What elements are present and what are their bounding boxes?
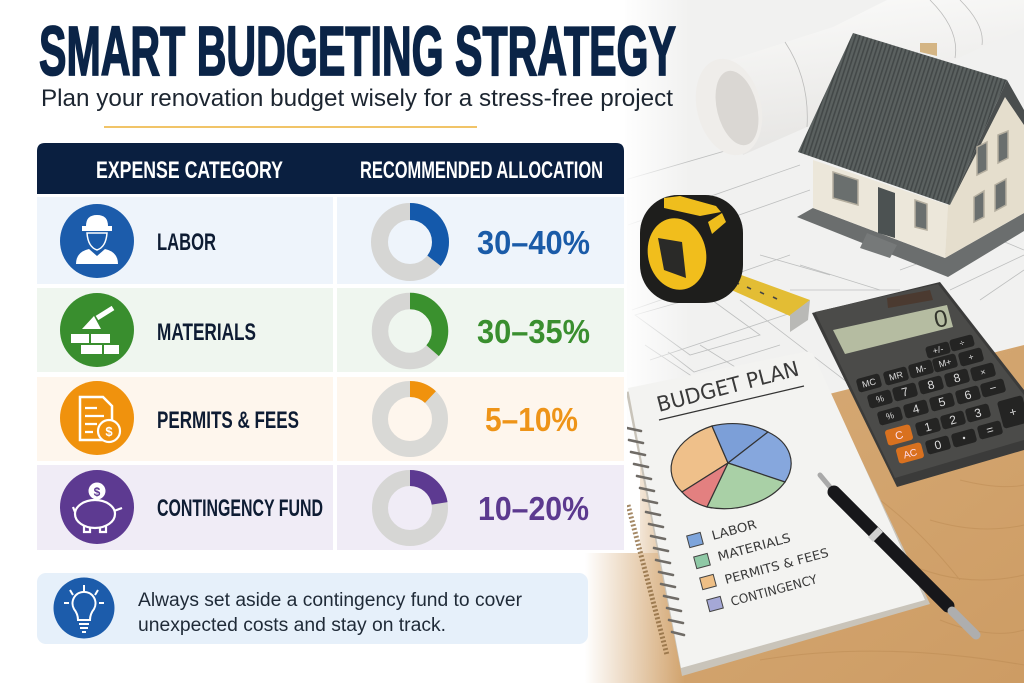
calculator keys: 0 bbox=[933, 437, 943, 453]
calculator bbox=[812, 282, 1024, 487]
calculator keys: M+ bbox=[938, 357, 952, 369]
tape measure bbox=[640, 195, 810, 332]
wooden table bbox=[560, 345, 1024, 683]
table header: RECOMMENDED ALLOCATION bbox=[360, 157, 603, 184]
notebook pie chart bbox=[671, 424, 791, 509]
model house bbox=[797, 33, 1024, 277]
row: materials bbox=[37, 288, 624, 372]
donut: 30-35% bbox=[380, 301, 440, 361]
callout: contingency tip: Always set aside a contingency fund to cover bbox=[138, 590, 523, 611]
calculator display digit: 0 bbox=[932, 305, 950, 334]
calculator keys: 7 bbox=[900, 384, 910, 400]
donut: 30-40% bbox=[380, 212, 440, 272]
row: materials: 30–35% bbox=[477, 313, 590, 350]
row: contingency fund: 10–20% bbox=[478, 490, 589, 527]
row: contingency fund: CONTINGENCY FUND bbox=[157, 495, 323, 522]
calculator keys: 4 bbox=[911, 401, 921, 417]
row: labor: 30–40% bbox=[477, 224, 590, 261]
white fade into photo bbox=[620, 0, 690, 553]
icon: trowel and bricks bbox=[60, 293, 134, 367]
calculator keys: • bbox=[961, 433, 967, 443]
calculator keys: AC bbox=[902, 447, 919, 462]
wood fade at lower left bbox=[560, 553, 685, 683]
row: labor: LABOR bbox=[157, 229, 216, 256]
table header bbox=[37, 143, 624, 194]
icon: piggy bank: $ bbox=[94, 485, 101, 499]
icon: light bulb bbox=[54, 578, 114, 638]
icon: piggy bank bbox=[60, 470, 134, 544]
calculator keys: 8 bbox=[952, 370, 962, 386]
calculator keys: % bbox=[885, 410, 895, 422]
table backing bbox=[37, 143, 627, 553]
calculator keys: M- bbox=[915, 363, 927, 375]
calculator keys: 6 bbox=[963, 387, 973, 403]
calculator keys: + bbox=[1008, 404, 1018, 420]
donut: 5-10% bbox=[380, 389, 440, 449]
calculator keys: MR bbox=[888, 369, 905, 383]
calculator keys: × bbox=[979, 366, 987, 378]
notebook bbox=[626, 352, 930, 676]
calculator keys: 8 bbox=[926, 377, 936, 393]
notebook legend: PERMITS & FEES bbox=[723, 545, 830, 587]
calculator keys: + bbox=[967, 351, 975, 363]
photo: renovation planning desk bbox=[560, 0, 1024, 683]
calculator keys: +/- bbox=[932, 344, 944, 356]
row: permits and fees: PERMITS & FEES bbox=[157, 407, 299, 434]
gold divider bbox=[104, 126, 477, 128]
row: materials: MATERIALS bbox=[157, 319, 256, 346]
icon: worker bbox=[60, 204, 134, 278]
blueprint paper bbox=[625, 0, 1024, 440]
row: permits and fees bbox=[37, 377, 624, 461]
calculator keys: 1 bbox=[923, 419, 933, 435]
callout: contingency tip bbox=[37, 573, 588, 644]
calculator keys: 3 bbox=[973, 405, 983, 421]
calculator keys: − bbox=[988, 380, 998, 396]
expense table bbox=[37, 143, 627, 553]
notebook legend: CONTINGENCY bbox=[729, 571, 819, 609]
donut: 10-20% bbox=[380, 478, 440, 538]
row: permits and fees: 5–10% bbox=[485, 401, 578, 438]
calculator keys: MC bbox=[861, 376, 878, 390]
notebook heading: BUDGET PLAN bbox=[654, 357, 801, 417]
calculator keys: C bbox=[894, 429, 905, 443]
calculator keys: 5 bbox=[937, 394, 947, 410]
pen bbox=[820, 475, 976, 635]
callout: contingency tip: unexpected costs and stay on track. bbox=[138, 615, 446, 636]
row: labor bbox=[37, 197, 624, 284]
calculator keys: ÷ bbox=[958, 338, 966, 348]
icon: document with dollar bbox=[60, 381, 134, 455]
calculator keys: 2 bbox=[948, 412, 958, 428]
calculator keys: % bbox=[875, 393, 885, 405]
calculator keys bbox=[856, 334, 1024, 464]
row: contingency fund bbox=[37, 465, 624, 550]
icon: document with dollar: $ bbox=[105, 424, 113, 439]
table header: EXPENSE CATEGORY bbox=[96, 157, 283, 184]
notebook legend bbox=[687, 516, 830, 612]
calculator keys: = bbox=[985, 422, 995, 438]
subtitle: Plan your renovation budget wisely for a stress-free project bbox=[41, 85, 673, 112]
rolled blueprint bbox=[686, 0, 1024, 162]
notebook legend: LABOR bbox=[710, 516, 759, 543]
notebook legend: MATERIALS bbox=[716, 530, 792, 564]
